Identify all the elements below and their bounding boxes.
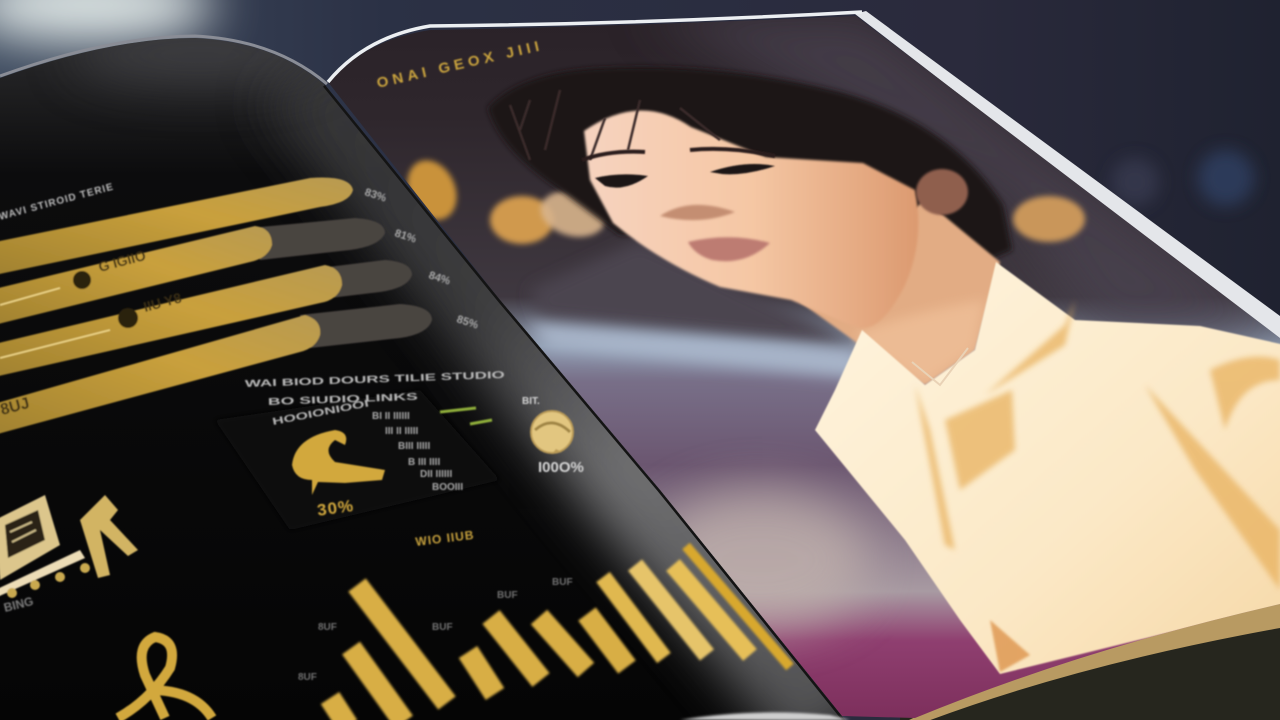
necklace	[912, 348, 968, 385]
stat list: BIII IIIII	[398, 441, 430, 452]
text block: HOOIONIOOI	[271, 398, 370, 428]
shirt shadows	[915, 300, 1280, 590]
light band	[525, 322, 860, 378]
bars label: WAVI STIROID TERIE	[0, 182, 115, 223]
horizontal bar chart: G IGIIO	[97, 247, 147, 275]
eyebrows	[582, 149, 775, 160]
text block: WAI BIOD DOURS TILIE STUDIO	[245, 370, 505, 390]
eyes	[595, 164, 775, 188]
nose shadow	[660, 205, 735, 220]
icon: globe	[531, 411, 573, 454]
stat list: III II IIIII	[385, 426, 419, 437]
chart axis labels: 8UF	[298, 672, 317, 683]
stat list: B III IIII	[408, 457, 440, 468]
icon: treble clef	[118, 637, 212, 718]
face	[584, 110, 918, 328]
hair	[488, 67, 1012, 262]
green highlights	[440, 408, 492, 424]
neck	[800, 200, 1000, 385]
page gutter edge	[325, 85, 845, 720]
globe labels: I00O%	[538, 459, 584, 476]
pale lower haze	[650, 490, 870, 630]
bar value labels: 81%	[393, 227, 418, 246]
neck shadow	[858, 300, 985, 385]
icon: gold bird	[292, 430, 385, 495]
panel: left magazine page with gold charts	[0, 25, 850, 720]
chart axis labels: 8UF	[318, 622, 337, 633]
page bottom highlight	[680, 712, 850, 720]
page title: ONAI GEOX JIII	[375, 38, 541, 92]
bokeh lights	[398, 152, 1085, 244]
stat: 30%: 30%	[316, 496, 355, 520]
portrait illustration	[488, 67, 1280, 674]
chart heading: WIO IIUB	[415, 528, 475, 549]
console caption: BING	[2, 594, 35, 615]
panel backing	[215, 390, 500, 530]
vertical bar chart	[330, 546, 790, 720]
haze near spine	[530, 240, 860, 350]
icon: studio console	[0, 495, 138, 598]
globe labels	[522, 396, 584, 476]
globe labels: BIT.	[522, 396, 540, 407]
horizontal bar chart: IIU Y8	[142, 289, 183, 315]
fringe strands	[510, 90, 720, 160]
stat list	[372, 411, 463, 493]
panel: right magazine page with portrait	[328, 10, 1280, 720]
stat list: DII IIIIII	[420, 469, 452, 480]
chart axis labels: BUF	[497, 590, 518, 601]
bar value labels	[363, 186, 480, 332]
chart axis labels: BUF	[432, 622, 453, 633]
bar value labels: 83%	[363, 186, 388, 205]
text block: BO SIUDIO LINKS	[268, 392, 419, 408]
stat list: BOOIII	[432, 482, 463, 493]
gloss along the spine	[310, 60, 850, 720]
bar value labels: 85%	[455, 313, 480, 332]
shirt	[815, 262, 1280, 674]
bar value labels: 84%	[427, 269, 452, 288]
top page sheen	[82, 38, 306, 100]
chart axis labels	[298, 577, 573, 683]
horizontal bar chart	[0, 178, 432, 436]
upper page tone	[640, 10, 1280, 340]
lips	[688, 237, 770, 261]
chart axis labels: BUF	[552, 577, 573, 588]
stat list: BI II IIIIII	[372, 411, 410, 422]
ear	[916, 169, 968, 215]
text block	[245, 370, 505, 428]
